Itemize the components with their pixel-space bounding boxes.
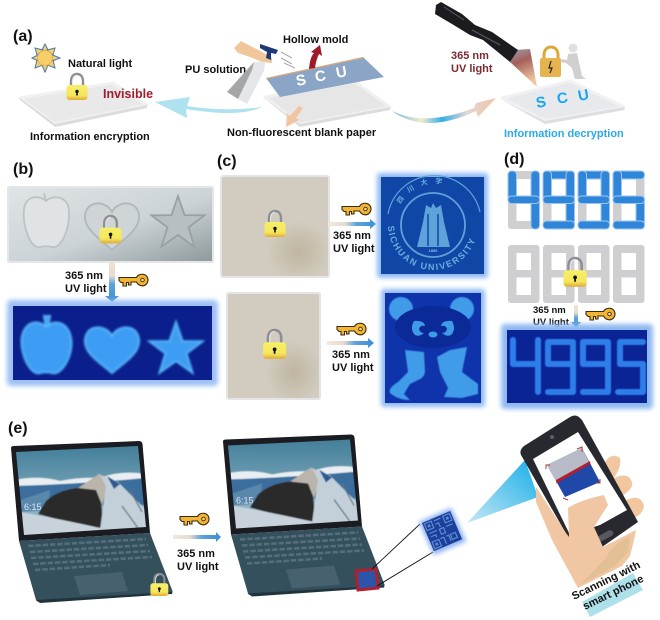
icon: golden lock and person [540,44,586,79]
photo: university seal: 1896 [429,248,438,253]
label: 365 nm UV light [333,230,375,255]
label: 365 nm UV light: 365 nm [65,270,103,282]
icon: lock [100,216,122,243]
arrow: downward [105,262,119,302]
heading: (c): (c) [217,153,237,170]
panel: (d) seven-segment digits [501,151,653,409]
illustration: laptop before [10,440,173,603]
label: 365 nm UV light: UV light [451,63,493,75]
panel: (b) shapes [7,161,218,386]
label: 365 nm UV light: UV light [533,317,570,328]
arrow: to encryption [155,97,262,118]
paper: decrypted sheet [502,81,625,124]
label: PU solution: PU solution [185,64,246,76]
panel: (c) logo and panda [217,153,492,410]
icon: hand with spray bottle [227,41,295,104]
photo: panda [381,289,485,407]
icon: key [586,308,615,320]
label: 365 nm UV light [65,270,107,295]
paper: decrypted sheet: U [577,86,590,105]
icon: key [180,513,209,525]
label: 365 nm UV light: UV light [177,561,219,573]
icon: key [119,274,148,286]
paper: decrypted sheet: S [535,93,548,112]
icon: key [337,323,366,335]
label: invisible: Invisible [103,87,153,101]
icon: key [342,203,371,215]
heading: (b): (b) [13,161,33,178]
heading: (d): (d) [504,151,524,168]
connector lines [372,524,433,586]
chart: lit pattern 4995 [508,171,644,229]
label: 365 nm UV light: 365 nm [332,349,370,361]
chart: blank pattern [508,245,644,303]
label: 365 nm UV light [533,305,570,328]
mold plate with letters: C [314,67,328,86]
label: non-fluorescent blank paper: Non-fluorescent blank paper [227,127,377,139]
label: 365 nm UV light: 365 nm [533,305,566,316]
icon: lock [564,258,587,287]
paper: encrypted sheet [20,83,147,127]
paper: blank sheet [265,82,390,127]
label: information decryption: Information decryption [504,128,624,140]
mold plate with letters: S [295,71,308,90]
panel: (e) laptop scanning [8,416,646,617]
photo: university seal [373,170,492,282]
label: natural light: Natural light [68,58,133,70]
label: 365 nm UV light: UV light [332,362,374,374]
marker: red square with QR [356,569,378,590]
arrow: to decryption [392,98,496,123]
photo: university seal: 四川大学 [396,178,442,204]
icon: lock [264,211,286,237]
icon: UV flashlight [435,2,537,87]
arrow: right [327,338,374,348]
label: 365 nm UV light: 365 nm [451,50,489,62]
label: information encryption: Information encryption [30,131,150,143]
photo: university seal: SICHUAN UNIVERSITY [388,226,474,270]
arrow: small orange [286,106,303,127]
label: 365 nm UV light: 365 nm [177,548,215,560]
label: scanning with smart phone: smart phone [581,573,646,613]
photo: blank sheet bottom [227,293,320,399]
mold plate with letters: U [335,63,348,82]
icon: lock [150,574,168,596]
label: 365 nm UV light: UV light [333,243,375,255]
panel: (a) encryption and decryption workflow [13,2,625,143]
icon: lock [263,330,286,359]
paper: decrypted sheet: C [556,89,570,108]
arrow: downward [571,305,581,328]
photo: embossed mold shapes [7,186,214,263]
label: hollow mold: Hollow mold [283,34,348,46]
icon: sun [32,44,60,72]
arrow: right [173,532,221,542]
photo: glowing 4995 [501,324,653,409]
label: 365 nm UV light [332,349,374,374]
beam: camera cone [467,460,538,523]
mold plate with letters [266,57,384,97]
label: 365 nm UV light: 365 nm [333,230,371,242]
label: 365 nm UV light [451,50,493,75]
heading: (e): (e) [8,420,28,437]
heading: (a): (a) [13,28,33,45]
label: scanning with smart phone: Scanning with [570,559,643,603]
arrow: right [328,219,376,229]
photo: glowing shapes [7,300,218,386]
illustration: laptop after [222,434,385,596]
arrow: mold lifted away [309,45,322,69]
illustration: hand and smartphone [520,416,644,588]
photo: blank sheet top [221,176,329,277]
label: 365 nm UV light: UV light [65,283,107,295]
icon: enlarged QR code [422,511,463,552]
icon: lock [66,74,88,100]
label: 365 nm UV light [177,548,219,573]
